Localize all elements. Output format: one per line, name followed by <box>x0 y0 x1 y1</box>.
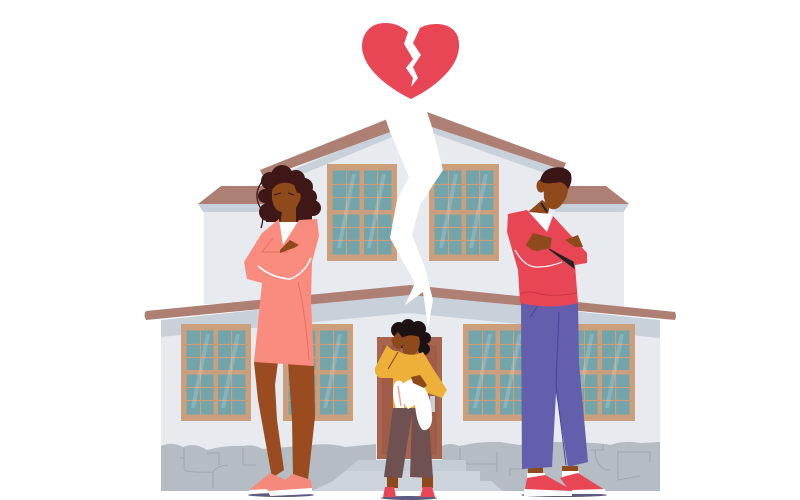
window lower 4 <box>565 324 635 421</box>
child hand holding rabbit <box>411 375 427 388</box>
child <box>375 319 447 500</box>
child trousers <box>384 408 433 478</box>
woman face <box>272 183 301 224</box>
man neck <box>528 200 550 214</box>
man arm line <box>515 250 562 267</box>
child shadow <box>381 496 437 500</box>
man socks <box>527 471 579 480</box>
man hair <box>540 167 572 189</box>
child hand at face <box>391 332 404 350</box>
window lower 3 <box>463 324 533 421</box>
child sweater <box>375 345 447 408</box>
man hand right <box>565 235 583 247</box>
child arm line <box>388 352 398 369</box>
man shoes <box>524 473 605 496</box>
man shirt <box>528 212 552 232</box>
side wing left <box>198 186 275 304</box>
woman eyes <box>274 193 294 195</box>
child shoes <box>383 487 435 497</box>
man hem line <box>520 292 577 295</box>
window lower 2 <box>283 324 353 421</box>
house <box>144 108 676 491</box>
man sweater <box>507 210 587 306</box>
lower wall <box>161 296 660 491</box>
man ear <box>536 180 546 192</box>
side wing right <box>555 186 629 307</box>
window lower 1 <box>181 324 251 421</box>
woman legs <box>254 362 315 480</box>
man ankles <box>528 466 578 474</box>
trouser details <box>530 306 566 465</box>
man shadow <box>521 493 607 497</box>
woman dress details <box>262 238 309 360</box>
woman shoes <box>249 473 312 496</box>
crack through house <box>386 100 443 328</box>
child face <box>402 335 420 355</box>
stone wall right <box>442 442 660 491</box>
child legs <box>387 476 433 488</box>
heart crack <box>404 28 421 87</box>
broken heart <box>362 23 459 99</box>
woman sleeve highlight <box>258 258 311 279</box>
woman hair lock <box>257 178 265 228</box>
man trousers <box>521 303 588 469</box>
door <box>377 337 442 459</box>
window upper right <box>429 164 499 261</box>
upper wall <box>274 122 555 310</box>
stone wall left <box>161 444 376 491</box>
window upper left <box>327 164 397 261</box>
steps <box>312 460 503 491</box>
woman <box>244 165 321 497</box>
woman dress <box>244 219 319 366</box>
upper roof shadow <box>268 122 563 186</box>
upper roof <box>260 108 566 178</box>
woman shadow <box>248 493 314 497</box>
man <box>507 167 607 497</box>
lower roof <box>144 285 676 320</box>
woman hair <box>258 165 321 222</box>
man head <box>543 175 569 209</box>
man hand left <box>526 233 552 251</box>
rabbit toy <box>393 379 432 430</box>
woman hand <box>280 240 299 253</box>
woman shirt <box>279 222 299 244</box>
child hair <box>391 319 431 355</box>
lower roof shadow <box>161 294 660 338</box>
man collar <box>541 203 547 212</box>
man bag strap <box>549 249 574 268</box>
